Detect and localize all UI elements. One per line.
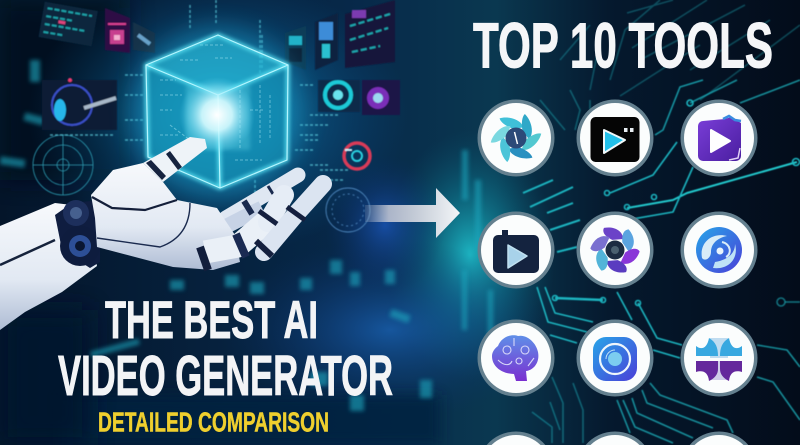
- palm: [91, 163, 240, 270]
- dial: lower right hud: [326, 188, 370, 232]
- data speckles: [50, 0, 350, 195]
- back fingers: [214, 175, 298, 232]
- screen: right top panels: [285, 0, 395, 70]
- arrow: [365, 188, 460, 238]
- icon 1: teal swirl: [478, 100, 554, 176]
- screen: teal data panel: [38, 2, 98, 46]
- icon 6: blue swirl: [680, 212, 758, 288]
- title: the best ai: THE BEST AI: [105, 291, 318, 350]
- subtitle: detailed comparison: DETAILED COMPARISON: [98, 406, 329, 438]
- front fingers: [200, 184, 323, 270]
- icon 11: cropped circle centre: [586, 431, 644, 445]
- icon 3: purple play tile: [680, 100, 758, 176]
- forearm: [0, 203, 97, 330]
- dial: hud radar: [33, 135, 93, 195]
- icon 5: purple shutter: [576, 212, 654, 288]
- dial: red ring: [344, 143, 370, 169]
- icon 2: black play tile: [576, 100, 654, 176]
- icon 9: four arrows: [680, 320, 758, 396]
- screen: swirl panel: [42, 78, 117, 130]
- screen: magenta panel: [105, 8, 155, 53]
- screen: cyan and purple discs: [318, 80, 400, 115]
- robot hand: [0, 137, 323, 330]
- icon 8: blue ring tile: [576, 320, 654, 396]
- circuit board traces: [523, 0, 800, 443]
- wrist joint: [55, 200, 100, 268]
- icon 7: brain: [478, 320, 554, 396]
- holographic screens: [33, 0, 400, 232]
- thumb: [143, 137, 207, 182]
- title: video generator: VIDEO GENERATOR: [58, 344, 393, 408]
- icon 4: camera play: [478, 212, 554, 288]
- holographic cube: [133, 27, 303, 197]
- icon 10: cropped circle left: [487, 431, 545, 445]
- icon 12: cropped circle right: [690, 431, 748, 445]
